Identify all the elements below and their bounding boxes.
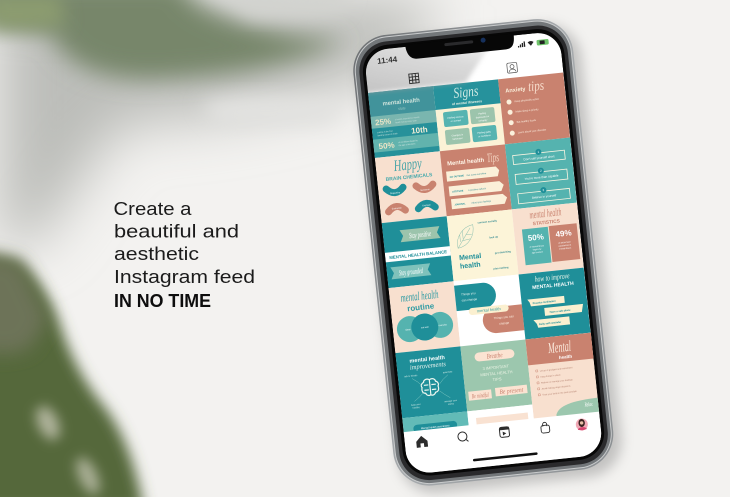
- front camera: [480, 37, 486, 43]
- tile: happy brain chemicals: Dopamine: [390, 192, 401, 195]
- headline text block: Instagram feed: [114, 266, 255, 287]
- tile: numbered reminders: 2: [540, 169, 542, 173]
- tile: numbered reminders: You're more than capable: [524, 173, 559, 181]
- phone notch: [405, 33, 515, 60]
- tile: mental health stats: 10th: [411, 125, 428, 136]
- tile: 3 important mental health tips: Breathe: [486, 351, 503, 361]
- tile: mental health checklist: [525, 332, 603, 419]
- tile: mental health improvements brain: quiet time: [443, 370, 453, 374]
- tile: anxiety tips: [498, 72, 570, 144]
- tile: signs of mental illnesses: Feeling guilty: [477, 130, 492, 135]
- tile: how to improve mental health: MENTAL HEALTH: [532, 281, 574, 291]
- chart: venn diagram: sleep: [405, 329, 412, 332]
- tile: how to improve mental health: Have a safe place: [550, 309, 571, 314]
- tile: happy brain chemicals: BRAIN CHEMICALS: [385, 172, 433, 183]
- tile: how to improve mental health: Practice meditation: [533, 300, 556, 305]
- tile: mental health stats: health issues every year: [395, 119, 417, 124]
- tile: numbered reminders: [505, 138, 577, 209]
- tile: mental health balance: Stay positive: [409, 229, 432, 240]
- home indicator: [473, 452, 538, 462]
- tile: mental health stats: mental health: [382, 98, 421, 108]
- tile: things you can change: change: [499, 321, 510, 326]
- tile: mental health leaf list: connect socially: [477, 219, 498, 225]
- tile: happy brain chemicals: [375, 151, 447, 223]
- tile: happy brain chemicals: Happy: [392, 155, 423, 175]
- background: paper with blurred leaf shadows: [0, 0, 448, 497]
- icon: brain: [421, 378, 439, 396]
- tile: partial bottom-middle post: [467, 405, 534, 428]
- tile: mental health checklist: health: [559, 354, 573, 360]
- tile: mental health statistics: begins by: [533, 249, 541, 251]
- speaker: [444, 40, 473, 46]
- bottom navigation bar: [404, 412, 604, 476]
- tile: mental health statistics: of adults have: [558, 240, 572, 245]
- tile: mental health stats: suicide is the 2nd: [377, 130, 393, 134]
- chart: venn diagram: [396, 311, 455, 343]
- tile: numbered reminders: 1: [537, 150, 540, 154]
- tile: signs of mental illnesses: or worthless: [478, 134, 492, 138]
- tile: mental health statistics: STATISTICS: [532, 218, 561, 227]
- tile: mental health leaf list: plan nothing: [493, 266, 509, 271]
- tile: mental health statistics: 50%: [527, 232, 544, 243]
- tile: mental health tips ribbons: ATTITUDE: [452, 189, 464, 194]
- tile: mental health tips ribbons: Mental health: [447, 158, 485, 167]
- icon: profile avatar: [576, 418, 588, 430]
- tile: mental health leaf list: health: [460, 261, 481, 271]
- tile: partial bottom-left post: Mental health awareness: [421, 423, 451, 430]
- tile: mental health statistics: mental health: [529, 206, 562, 222]
- tile: mental health stats: 50%: [378, 141, 395, 151]
- tile: mental health statistics: experienced a: [559, 244, 572, 248]
- profile tab bar: [409, 62, 518, 84]
- post grid: [368, 72, 604, 435]
- tile: mental health routine: routine: [407, 301, 435, 313]
- tile: mental health improvements brain: improvements: [410, 360, 446, 372]
- tile: mental health leaf list: [447, 209, 519, 281]
- headline text block: [114, 198, 255, 311]
- tile: mental health stats: leading cause of death: [377, 132, 398, 137]
- icon: home: [416, 435, 428, 448]
- tile: signs of mental illnesses: Feeling: [478, 113, 487, 116]
- phone screen: [353, 27, 608, 477]
- tile: how to improve mental health: Daily self-reminder: [539, 321, 562, 326]
- tile: signs of mental illnesses: behaviour: [453, 137, 463, 141]
- tile: mental health statistics: of mental illness: [529, 244, 544, 249]
- tile: 3 important mental health tips: MENTAL HEALTH: [480, 369, 513, 377]
- tile: mental health leaf list: look up: [489, 235, 499, 239]
- tile: signs of mental illnesses: Signs: [453, 83, 479, 102]
- tile: mental health statistics: 49%: [555, 228, 572, 239]
- tile: mental health improvements brain: stress: [448, 402, 455, 406]
- tile: mental health checklist: Reduce or manage your feelings: [541, 378, 574, 385]
- tile: mental health leaf list: Mental: [459, 253, 482, 262]
- tile: happy brain chemicals: Serotonin: [420, 188, 431, 192]
- icon: tagged tab: [507, 62, 518, 73]
- tile: mental health balance: Stay grounded: [399, 266, 424, 278]
- tile: mental health stats: the age of fourteen: [399, 142, 416, 147]
- tile: mental health improvements brain: [395, 346, 467, 418]
- tile: things you can change: Things you: [461, 291, 476, 297]
- tile: mental health stats: 25%: [375, 117, 392, 127]
- tile: anxiety tips: Keep physically active: [514, 98, 540, 103]
- tile: mental health routine: mental health: [400, 287, 439, 305]
- tile: mental health leaf list: get sketching: [495, 250, 512, 255]
- tile: signs of mental illnesses: of mental illnesses: [452, 99, 482, 106]
- tile: signs of mental illnesses: Changes in: [451, 134, 464, 137]
- tile: mental health checklist: Mental: [547, 339, 572, 357]
- tile: partial bottom-left post: [402, 411, 469, 434]
- tile: 3 important mental health tips: TIPS: [492, 376, 502, 382]
- tile: mental health stats: of conditions begin by: [398, 139, 418, 144]
- tile: anxiety tips: Anxiety: [505, 86, 527, 95]
- tile: mental health tips ribbons: A positive outlook: [468, 187, 487, 192]
- tile: anxiety tips: Make sleep a priority: [515, 108, 539, 113]
- tile: happy brain chemicals: Endorphin: [392, 206, 403, 211]
- tile: signs of mental illnesses: or worried: [451, 119, 462, 123]
- tile: things you can change: can change: [461, 297, 478, 303]
- tile: mental health improvements brain: healthy: [412, 406, 421, 410]
- tile: numbered reminders: Don't sell yourself short: [523, 154, 555, 161]
- tile: mental health tips ribbons: GO OUTSIDE: [450, 175, 465, 179]
- tile: 3 important mental health tips: Be present: [499, 386, 524, 396]
- tile: mental health statistics: age fourteen: [532, 250, 543, 255]
- tile: mental health routine: [389, 281, 460, 353]
- tile: mental health improvements brain: keep your: [411, 403, 421, 407]
- chart: venn diagram: eat well: [421, 326, 429, 329]
- status bar time: 11:44: [377, 55, 398, 66]
- tile: mental health improvements brain: mental health: [409, 355, 446, 365]
- tile: mental health tips ribbons: Tips: [486, 149, 500, 165]
- tile: how to improve mental health: how to improve: [534, 271, 570, 284]
- tile: signs of mental illnesses: Feeling anxious: [447, 116, 464, 120]
- tile: mental health tips ribbons: About your feelings: [471, 200, 492, 205]
- icon: shop: [540, 422, 550, 433]
- tile: mental health improvements brain: manage your: [444, 399, 457, 403]
- tile: mental health checklist: Treat your body in the best possible: [542, 390, 578, 397]
- tile: mental health balance: MENTAL HEALTH BALANCE: [389, 249, 447, 260]
- tile: 3 important mental health tips: [460, 339, 532, 411]
- tile: mental health balance: [382, 216, 454, 288]
- tile: signs of mental illnesses: [433, 79, 505, 151]
- tile: mental health stats: of adults experience mental: [395, 116, 420, 121]
- tile: things you can change: [454, 274, 525, 346]
- tile: mental health statistics: [512, 203, 584, 274]
- tile: anxiety tips: Learn about your disorder: [518, 128, 547, 134]
- headline text block: beautiful and: [114, 220, 239, 242]
- tile: mental health checklist: Keep things in check: [540, 373, 562, 379]
- tile: mental health checklist: Relax: [584, 402, 593, 409]
- screen shadow from leaves: [366, 46, 486, 96]
- tile: signs of mental illnesses: unhappy: [478, 120, 488, 123]
- tile: 3 important mental health tips: Be mindful: [471, 392, 489, 400]
- tile: numbered reminders: Believe in yourself: [532, 193, 557, 200]
- icon: reels: [499, 427, 510, 438]
- tile: anxiety tips: tips: [527, 79, 545, 95]
- tile: mental health statistics: mental illness: [559, 246, 571, 251]
- tile: mental health tips ribbons: [440, 144, 512, 216]
- status bar icons: [517, 39, 549, 48]
- tile: mental health stats: [368, 86, 440, 158]
- icon: leaf sketch: [457, 224, 474, 248]
- chart: venn diagram: exercise: [438, 323, 448, 327]
- headline text block: Create a: [114, 198, 192, 219]
- tile: things you can change: mental health: [477, 306, 501, 314]
- icon: search: [457, 431, 468, 442]
- headline text block: aesthetic: [114, 243, 199, 264]
- tile: how to improve mental health: [519, 268, 590, 339]
- tile: signs of mental illnesses: depressed or: [476, 115, 490, 119]
- tile: mental health tips ribbons: Get some sunshine: [466, 172, 487, 177]
- tile: mental health improvements brain: talk to friends: [404, 374, 418, 378]
- tile: 3 important mental health tips: 3 IMPORTANT: [482, 363, 510, 371]
- tile: happy brain chemicals: Oxytocin: [422, 203, 432, 207]
- tile: mental health tips ribbons: JOURNAL: [454, 202, 466, 206]
- tile: anxiety tips: Eat healthy foods: [517, 119, 537, 124]
- tile: mental health stats: stats: [398, 105, 406, 111]
- phone mockup: [350, 15, 625, 497]
- tile: numbered reminders: 3: [542, 188, 545, 192]
- tile: mental health checklist: Avoid making major decisions: [542, 384, 571, 391]
- headline text block: IN NO TIME: [114, 290, 211, 311]
- tile: mental health checklist: Let go of grudges and resentment: [540, 366, 573, 373]
- icon: grid tab: [409, 73, 419, 84]
- tile: things you can change: Things you can: [493, 314, 514, 320]
